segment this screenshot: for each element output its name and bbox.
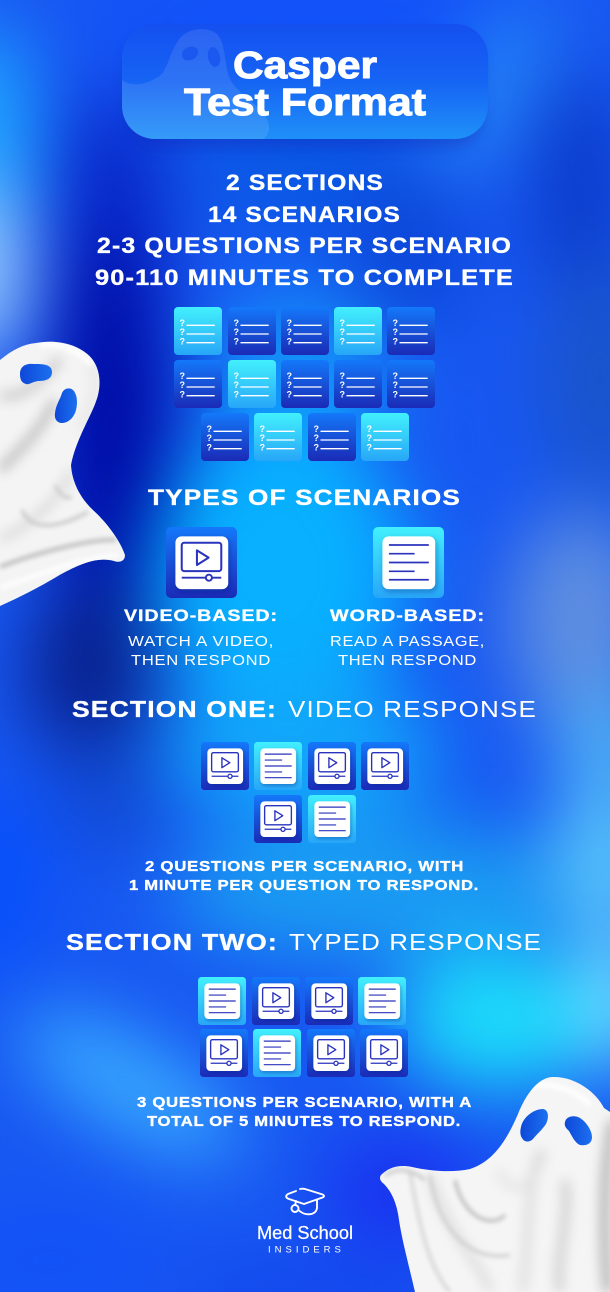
question tiles grid: ? (287, 327, 292, 337)
question tiles grid: ? (234, 371, 239, 381)
question tiles grid: ? (393, 327, 398, 337)
question tiles grid: ? (287, 390, 292, 400)
icon: ghost left (0, 335, 130, 615)
question tiles grid: ? (340, 327, 345, 337)
title text (184, 45, 426, 124)
icon: faded ghost behind title (122, 29, 269, 139)
question tiles grid: ? (234, 380, 239, 390)
question tiles grid: ? (287, 336, 292, 346)
question tiles grid: ? (234, 327, 239, 337)
question tiles grid: ? (180, 327, 185, 337)
heading: section one (72, 696, 537, 722)
heading: types of scenarios: TYPES OF SCENARIOS (148, 485, 461, 510)
text: section two details: TOTAL OF 5 MINUTES TO RESPOND. (147, 1114, 461, 1130)
text block: test overview: 90-110 MINUTES TO COMPLETE (95, 265, 514, 290)
question tiles grid: ? (180, 371, 185, 381)
question tiles grid: ? (207, 442, 212, 452)
heading: section one: SECTION ONE: (72, 696, 277, 722)
text block: test overview: 14 SCENARIOS (208, 202, 401, 227)
question tiles grid: ? (260, 433, 265, 443)
heading: section two: SECTION TWO: (66, 929, 278, 955)
panel: title (122, 24, 488, 149)
question tiles grid: ? (314, 424, 319, 434)
description: word-based: READ A PASSAGE, (330, 634, 485, 650)
icon: video (166, 527, 237, 598)
panel: word-based (330, 527, 485, 669)
question tiles grid: ? (314, 442, 319, 452)
question tiles grid: ? (367, 442, 372, 452)
question tiles grid: ? (287, 318, 292, 328)
question tiles grid: ? (207, 424, 212, 434)
question tiles grid: ? (340, 336, 345, 346)
ghost eye (55, 388, 77, 423)
question tiles grid: ? (180, 380, 185, 390)
heading: section two: TYPED RESPONSE (289, 929, 542, 955)
question tiles grid: ? (180, 336, 185, 346)
title text: Casper (233, 45, 377, 87)
text block: test overview: 2-3 QUESTIONS PER SCENARIO (97, 233, 512, 258)
question tiles grid: ? (314, 433, 319, 443)
question tiles grid: ? (367, 433, 372, 443)
heading: section two (66, 929, 542, 955)
question tiles grid: ? (234, 390, 239, 400)
question tiles grid: ? (234, 318, 239, 328)
title text: Test Format (184, 82, 426, 124)
ghost eye (20, 364, 52, 384)
text: section one details (129, 859, 479, 894)
heading: section one: VIDEO RESPONSE (288, 696, 537, 722)
question tiles grid: ? (340, 318, 345, 328)
question tiles grid: ? (287, 380, 292, 390)
description: video-based: WATCH A VIDEO, (128, 634, 274, 650)
logo: Med School Insiders (257, 1189, 353, 1256)
text: section two details: 3 QUESTIONS PER SCENARIO, WITH A (137, 1095, 472, 1111)
logo: Med School Insiders: INSIDERS (268, 1244, 345, 1256)
question tiles grid: ? (393, 390, 398, 400)
description: word-based (330, 634, 485, 669)
ghost eye (565, 1116, 592, 1145)
panel: video-based (124, 527, 278, 669)
logo: Med School Insiders: Med School (257, 1222, 353, 1243)
description: video-based: THEN RESPOND (131, 653, 271, 669)
icon: graduation cap with stethoscope (286, 1189, 324, 1214)
question tiles grid: ? (340, 380, 345, 390)
question tiles grid: ? (207, 433, 212, 443)
question tiles grid: ? (180, 390, 185, 400)
text: section one details: 2 QUESTIONS PER SCENARIO, WITH (145, 859, 464, 875)
question tiles grid: ? (180, 318, 185, 328)
section one tiles (201, 742, 409, 843)
question tiles grid (174, 307, 435, 461)
question tiles grid: ? (393, 380, 398, 390)
ghost eye (520, 1109, 548, 1142)
text block: test overview: 2 SECTIONS (226, 170, 384, 195)
question tiles grid: ? (260, 424, 265, 434)
label: video-based: VIDEO-BASED: (124, 606, 278, 625)
question tiles grid: ? (393, 318, 398, 328)
icon: document (373, 527, 444, 598)
question tiles grid: ? (393, 371, 398, 381)
question tiles grid: ? (340, 371, 345, 381)
question tiles grid: ? (393, 336, 398, 346)
question tiles grid: ? (287, 371, 292, 381)
text block: test overview (95, 170, 514, 290)
question tiles grid: ? (367, 424, 372, 434)
question tiles grid: ? (260, 442, 265, 452)
section two tiles (198, 977, 408, 1077)
text: section one details: 1 MINUTE PER QUESTION TO RESPOND. (129, 878, 479, 894)
label: word-based: WORD-BASED: (330, 606, 485, 625)
description: video-based (128, 634, 274, 669)
question tiles grid: ? (234, 336, 239, 346)
icon: ghost right (375, 1070, 610, 1292)
question tiles grid: ? (340, 390, 345, 400)
text: section two details (137, 1095, 472, 1130)
description: word-based: THEN RESPOND (338, 653, 477, 669)
